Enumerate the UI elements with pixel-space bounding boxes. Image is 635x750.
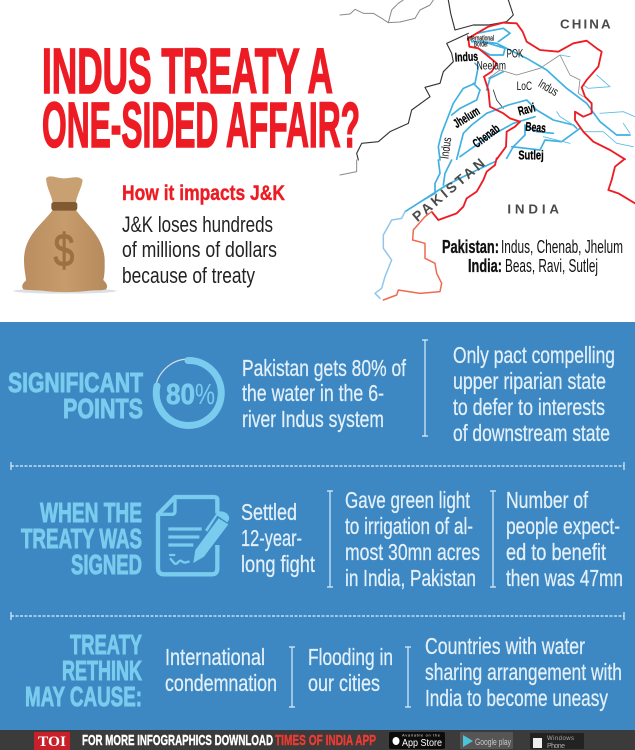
map label: Sutlej: Sutlej	[518, 148, 544, 162]
badge: App Store: App Store	[402, 738, 442, 749]
map label: Indus upper: Indus	[454, 49, 478, 65]
badge: Google Play	[460, 732, 513, 749]
text block: how it impacts J&K	[122, 182, 285, 288]
map label: Beas: Beas	[525, 120, 547, 135]
title	[42, 35, 360, 161]
badge: Windows Phone: Phone	[547, 743, 565, 750]
icon: money bag: $	[54, 224, 74, 276]
heading: treaty rethink may cause: TREATY	[70, 629, 142, 660]
text block: how it impacts J&K: because of treaty	[122, 263, 255, 288]
map label: Jhelum: Jhelum	[451, 104, 482, 131]
text: flooding in our cities: our cities	[308, 670, 380, 696]
title: INDUS TREATY A	[42, 35, 333, 107]
text: green light to irrigation: most 30mn acres	[345, 539, 480, 565]
text: people expected to benefit	[506, 487, 623, 591]
map label: China: CHINA	[560, 16, 611, 31]
heading: significant points: POINTS	[63, 393, 143, 424]
text: countries uneasy	[425, 633, 622, 711]
map: upper region lines	[340, 0, 635, 162]
badge: App Store	[389, 732, 445, 749]
map	[340, 0, 635, 300]
panel: blue background	[0, 322, 635, 730]
text: settled 12-year-long fight: Settled	[241, 499, 297, 525]
map: lower region lines	[340, 155, 635, 300]
chart: 80 percent ring	[155, 359, 223, 427]
text: settled 12-year-long fight: 12-year-	[241, 525, 302, 551]
text: international condemnation	[165, 644, 277, 696]
map label: international border: Border	[474, 42, 488, 49]
map legend: Pakistan:	[442, 236, 499, 257]
heading: when the treaty was signed: TREATY WAS	[21, 523, 142, 554]
badge: App Store: Available on the	[402, 732, 441, 738]
chart: 80 percent ring: 80	[166, 379, 195, 411]
text: settled 12-year-long fight	[241, 499, 315, 577]
map label: Ravi: Ravi	[516, 101, 537, 119]
footer bar	[0, 730, 635, 750]
text: countries uneasy: Countries with water	[425, 633, 585, 659]
map label: Pakistan: PAKISTAN	[409, 155, 488, 225]
icon: document and pen	[158, 497, 229, 574]
heading: when the treaty was signed: SIGNED	[71, 549, 142, 580]
badge: Windows Phone: Windows	[547, 736, 574, 742]
badge: Google Play: Google play	[475, 737, 511, 747]
text: flooding in our cities	[308, 644, 393, 696]
heading: when the treaty was signed	[21, 497, 142, 580]
heading: treaty rethink may cause: MAY CAUSE:	[25, 681, 142, 712]
map legend: India:	[468, 255, 502, 276]
map label: Neelam: Neelam	[477, 58, 506, 72]
text: international condemnation: International	[165, 644, 265, 670]
text: international condemnation: condemnation	[165, 670, 277, 696]
heading: significant points	[8, 367, 143, 424]
text: flooding in our cities: Flooding in	[308, 644, 393, 670]
map label: LoC: LoC	[517, 79, 532, 93]
text: Pakistan gets 80 percent: river Indus system	[242, 406, 384, 432]
text block: how it impacts J&K: How it impacts J&K	[122, 182, 285, 205]
logo: TOI: TOI	[38, 734, 66, 750]
map label: international border: International	[467, 36, 494, 43]
map label: international border	[467, 36, 494, 49]
badge: Windows Phone	[530, 733, 584, 750]
heading: treaty rethink may cause	[25, 629, 142, 712]
section: treaty rethink	[25, 629, 622, 712]
map label: PoK: POK	[507, 47, 524, 61]
text: Pakistan gets 80 percent	[242, 355, 406, 432]
section: significant points	[8, 340, 615, 446]
icon: money bag	[13, 176, 117, 294]
text: green light to irrigation: to irrigation of al-	[345, 513, 473, 539]
text: only pact	[453, 342, 615, 446]
heading: significant points: SIGNIFICANT	[8, 367, 143, 398]
text: Pakistan gets 80 percent: Pakistan gets 80% of	[242, 355, 406, 381]
map label: Indus west: Indus	[437, 136, 454, 160]
text block: how it impacts J&K: of millions of dollars	[122, 237, 277, 262]
logo: TOI	[34, 732, 70, 750]
chart: 80 percent ring: %	[195, 379, 215, 411]
section: when the treaty was signed	[21, 487, 623, 591]
map label: Indus east: Indus	[536, 76, 561, 99]
map label: Chenab: Chenab	[470, 121, 503, 151]
footer text: TIMES OF INDIA APP	[275, 732, 376, 749]
text: Pakistan gets 80 percent: the water in the 6-	[242, 380, 384, 406]
text: green light to irrigation	[345, 487, 480, 591]
heading: when the treaty was signed: WHEN THE	[40, 497, 142, 528]
text: green light to irrigation: Gave green light	[345, 487, 470, 513]
heading: treaty rethink may cause: RETHINK	[62, 655, 142, 686]
footer text: FOR MORE INFOGRAPHICS DOWNLOAD	[82, 732, 273, 749]
map legend	[442, 236, 623, 276]
map label: India: INDIA	[507, 201, 559, 216]
text: people expected to benefit: ed to benefit	[506, 539, 606, 565]
text block: how it impacts J&K: J&K loses hundreds	[122, 212, 273, 237]
text: green light to irrigation: in India, Pakistan	[345, 565, 476, 591]
text: people expected to benefit: Number of	[506, 487, 588, 513]
text: settled 12-year-long fight: long fight	[241, 551, 315, 577]
